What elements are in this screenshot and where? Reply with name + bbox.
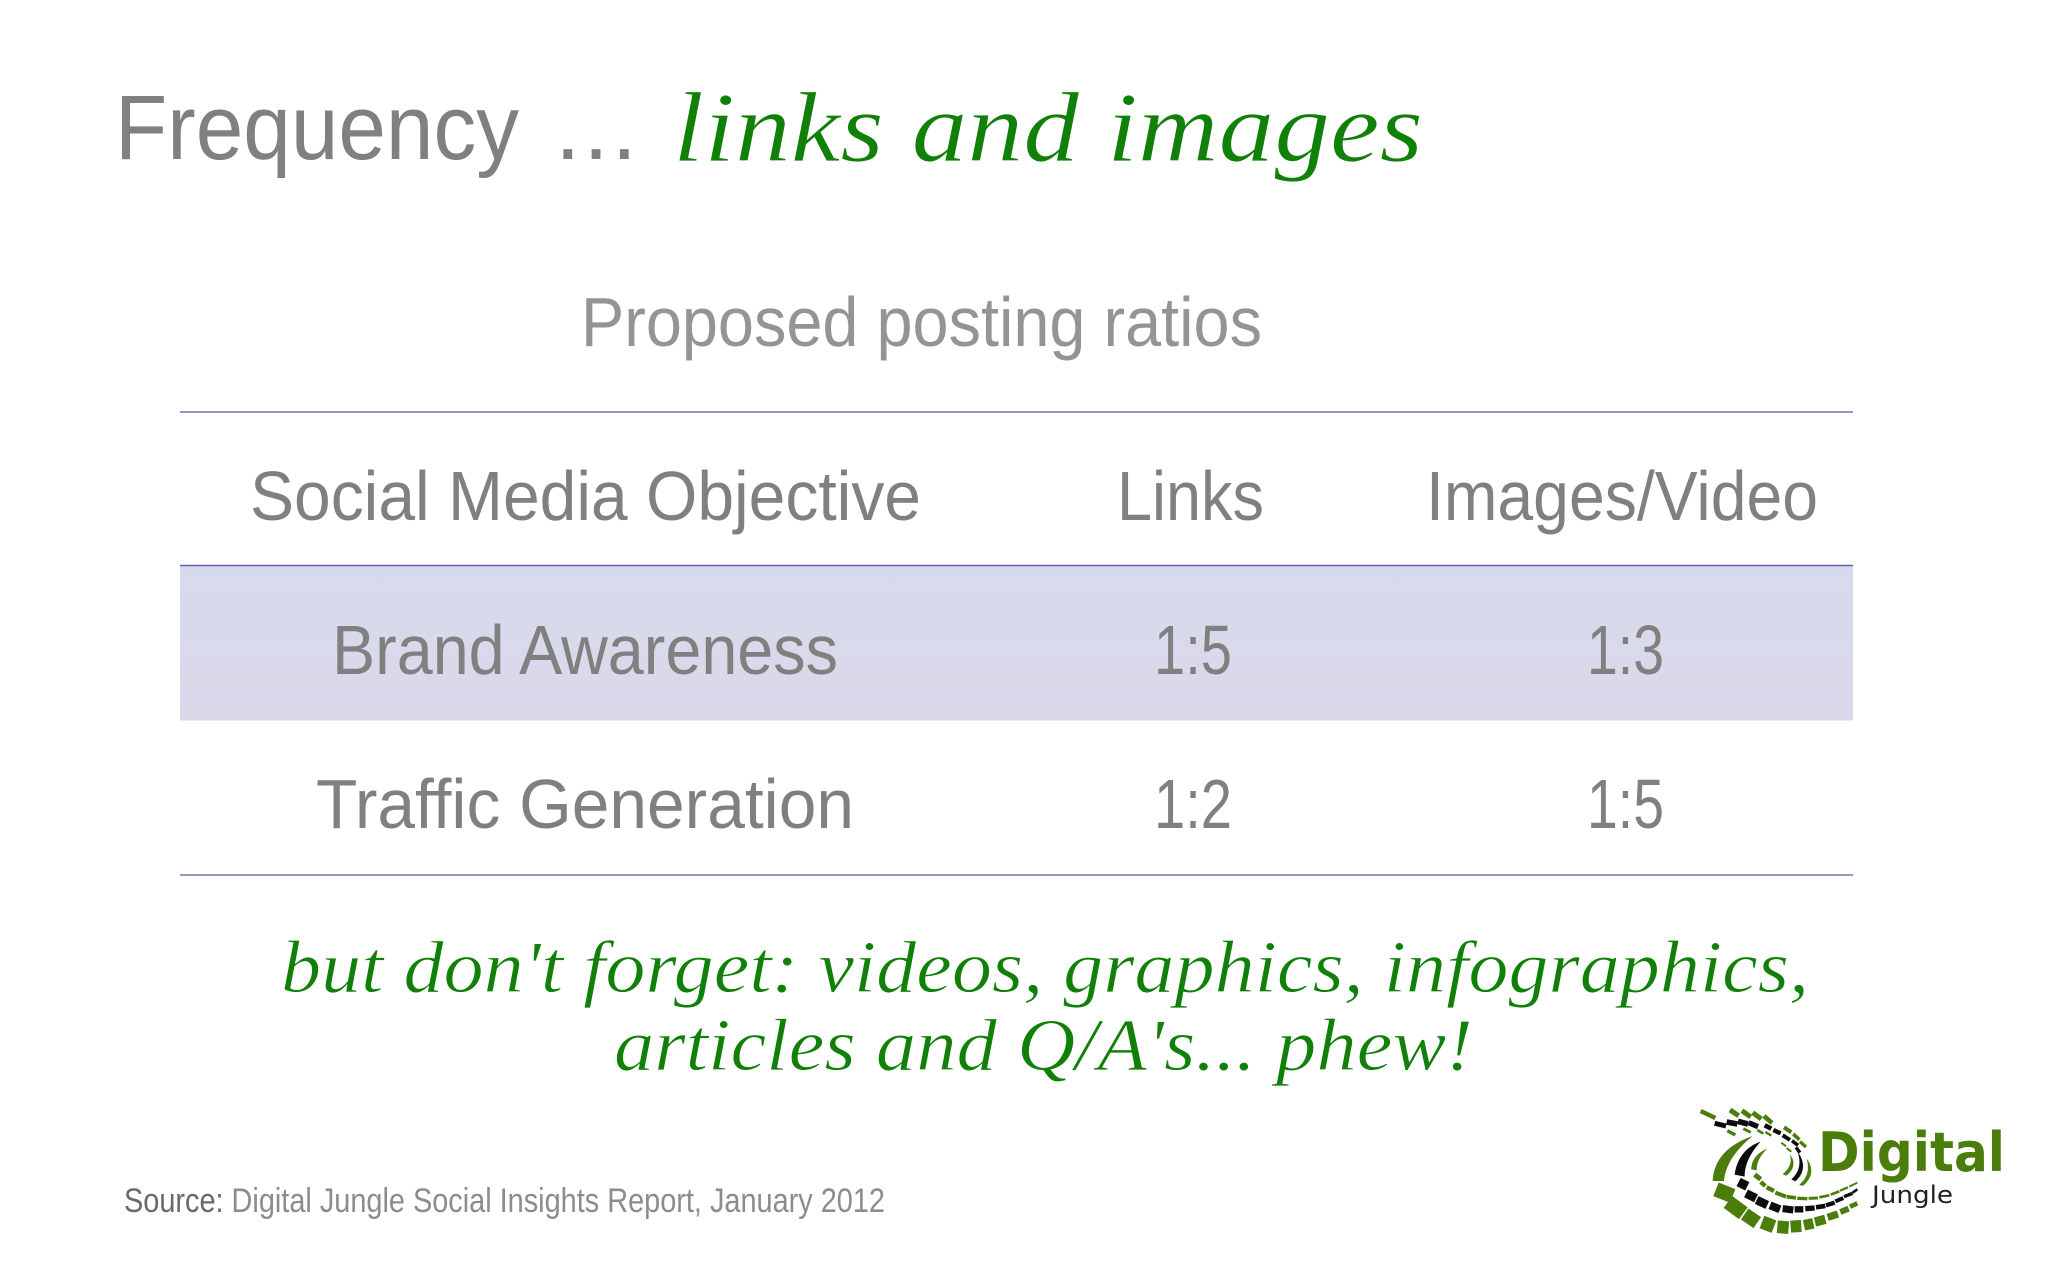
title: links and images [673,72,1423,183]
title: Frequency [115,77,519,179]
table header row: Social Media Objective [250,457,921,535]
row: traffic generation: 1:2 [1154,765,1232,843]
logo wordmark: Digital [1818,1121,2005,1184]
row: traffic generation: 1:5 [1587,765,1664,843]
row: brand awareness: Brand Awareness [332,611,838,689]
logo: Digital Jungle [1701,1110,2005,1228]
table header row [250,457,1818,535]
table header row: Links [1117,457,1264,535]
table header row: Images/Video [1426,457,1818,535]
row: traffic generation [316,765,1664,843]
title [115,72,1423,183]
logo sub-wordmark: Jungle [1870,1181,1953,1209]
handwritten note: but don't forget: videos, graphics, infographics, [281,927,1809,1009]
highlighted row background [180,566,1853,720]
table: posting ratios [180,412,1853,875]
row: brand awareness [332,611,1664,689]
row: traffic generation: Traffic Generation [316,765,854,843]
row: brand awareness: 1:5 [1154,611,1232,689]
handwritten note: articles and Q/A's... phew! [614,1005,1473,1087]
source note: Source: Digital Jungle Social Insights Report, January 2012 [124,1182,885,1220]
row: brand awareness: 1:3 [1587,611,1664,689]
logo swirl icon [1701,1110,1857,1228]
subtitle: proposed posting ratios: Proposed posting ratios [581,283,1262,361]
handwritten note [281,927,1809,1087]
title: ... [555,77,637,179]
